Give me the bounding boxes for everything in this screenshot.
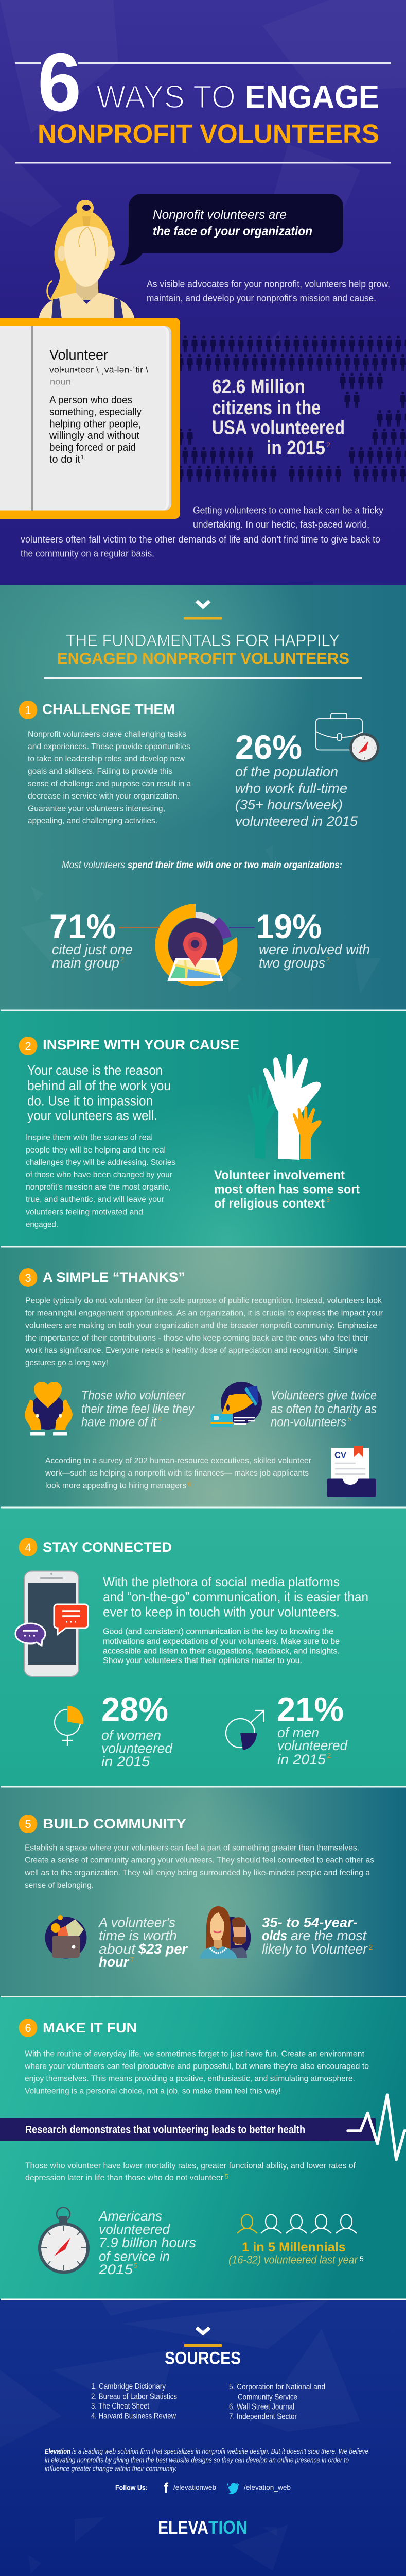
callout: most likely age group — [262, 1914, 373, 1957]
heading: section 4 stay connected: 4 — [25, 1541, 31, 1554]
text block: inspire intro: your volunteers as well. — [27, 1108, 157, 1123]
callout: feel like they have more time: 4 — [158, 1415, 162, 1423]
text block: thanks body — [25, 1296, 383, 1367]
text block: definition of volunteer: Volunteer — [49, 347, 108, 363]
text block: inspire intro: Your cause is the reason — [27, 1062, 163, 1078]
text block: about elevation: Elevation — [45, 2447, 70, 2456]
heading: section 4 stay connected — [19, 1538, 172, 1556]
callout: most likely age group: olds — [262, 1928, 287, 1943]
callout: value of volunteer time: time is worth — [99, 1928, 177, 1943]
panel: sources footer background — [0, 2299, 406, 2576]
heading: section 5 build community: 5 — [25, 1818, 31, 1831]
heading: section 6 make it fun — [19, 2019, 137, 2037]
callout: 21 percent of men: volunteered — [277, 1738, 348, 1753]
text block: follow us social links: Follow Us: — [115, 2483, 148, 2492]
callout: 19 percent statistic: 2 — [326, 955, 330, 963]
callout: 26 percent statistic: (35+ hours/week) — [235, 797, 343, 812]
callout: 71 percent statistic: main group — [52, 955, 119, 971]
text block: stay connected intro: and “on-the-go” communication, it is easier than — [103, 1589, 368, 1604]
text block: stay connected body: accessible and listen to their suggestions, feedback, and insights. — [103, 1647, 340, 1656]
callout: 62.6 million statistic: in 2015 — [267, 437, 325, 459]
text block: retention paragraph: volunteers often fall victim to the other demands of life and don't find time to give back to — [21, 534, 380, 545]
text block: challenge them body: sense of challenge and purpose can result in a — [28, 779, 191, 788]
callout: 71 percent statistic: 2 — [120, 955, 124, 963]
callout: 1 in 5 millennials — [228, 2240, 364, 2266]
text block: definition of volunteer: to do it — [49, 454, 80, 465]
text block: thanks body: for meaningful engagement opportunities. As an organization, it is crucial to express the impact your — [25, 1309, 383, 1318]
panel: challenge them background — [0, 585, 406, 1010]
text block: health benefits — [25, 2162, 356, 2182]
text block: retention paragraph: undertaking. In our hectic, fast-paced world, — [193, 519, 369, 530]
text block: inspire body: Inspire them with the stories of real — [26, 1133, 153, 1142]
panel: a simple thanks background — [0, 1247, 406, 1507]
callout: 7.9 billion hours: Americans — [98, 2208, 162, 2224]
text block: inspire body: people they will be helping and the real — [26, 1146, 166, 1155]
text block: build community body: Create a sense of community among your volunteers. They should feel connected to each other as — [25, 1856, 374, 1865]
text block: make it fun body: With the routine of everyday life, we sometimes forget to just have fun. Create an environment — [25, 2049, 365, 2059]
icon: female symbol with 28 percent wedge — [55, 1706, 83, 1746]
text block: make it fun body: enjoy themselves. This means providing a positive, enthusiastic, and stimulating atmosphere. — [25, 2074, 355, 2083]
text block: inspire body: engaged. — [26, 1220, 58, 1229]
callout: most likely age group: 35- to 54-year- — [262, 1914, 358, 1930]
panel: inspire with your cause background — [0, 1010, 406, 1247]
callout: 7.9 billion hours: 5 — [134, 2262, 137, 2269]
text block: follow us social links: f — [164, 2480, 169, 2496]
callout: 1 in 5 millennials: (16-32) volunteered last year — [228, 2253, 358, 2266]
text block: retention paragraph — [21, 505, 383, 558]
heading: section 4 stay connected: STAY CONNECTED — [43, 1539, 172, 1555]
text block: intro paragraph: maintain, and develop your nonprofit's mission and cause. — [147, 293, 376, 303]
callout: 19 percent statistic: 19% — [256, 907, 322, 945]
text block: source list: 3. The Cheat Sheet — [91, 2402, 150, 2411]
title: NONPROFIT VOLUNTEERS — [38, 119, 379, 148]
panel: stay connected background — [0, 1507, 406, 1787]
text block: follow us social links: /elevationweb — [173, 2483, 216, 2492]
callout: 19 percent statistic — [256, 907, 370, 971]
text block: definition of volunteer: vol•un•teer \ ˌvä-lən-ˈtir \ — [49, 365, 148, 375]
heading: section 6 make it fun: 6 — [25, 2022, 31, 2035]
text block: about elevation: influence greater change within their community. — [45, 2465, 177, 2473]
icon: chevron down — [184, 601, 222, 619]
icon: smartphone with chat bubbles — [15, 1571, 88, 1676]
icon: chevron down — [184, 2328, 222, 2347]
text block: build community body: well as to the organization. They will enjoy being surrounded by like-minded people and feeling a — [24, 1869, 370, 1877]
callout: religious context: 3 — [326, 1196, 330, 1204]
callout: speech bubble: Nonprofit volunteers are — [153, 208, 287, 222]
heading: fundamentals: THE FUNDAMENTALS FOR HAPPILY — [66, 631, 340, 650]
text block: stay connected intro — [103, 1574, 368, 1620]
callout: value of volunteer time: 7 — [130, 1956, 134, 1963]
callout: 7.9 billion hours — [98, 2208, 196, 2277]
text block: thanks body: volunteers are making on both your organization and the broader nonprofit community. Emphasize — [25, 1321, 377, 1330]
callout: 21 percent of men — [277, 1690, 348, 1767]
text block: stay connected body — [103, 1627, 340, 1665]
callout: 62.6 million statistic: 62.6 Million — [212, 376, 305, 398]
callout: religious context: of religious context — [214, 1196, 325, 1211]
text block: health benefits: 5 — [225, 2173, 228, 2180]
callout: 62.6 million statistic: citizens in the — [212, 397, 321, 419]
text block: intro paragraph: As visible advocates for your nonprofit, volunteers help grow, — [147, 279, 390, 290]
callout: most likely age group: are the most — [291, 1928, 367, 1943]
text block: survey of executives: look more appealing to hiring managers — [45, 1482, 186, 1490]
text block: stay connected body: Show your volunteers that their opinions matter to you. — [103, 1656, 302, 1665]
text block: inspire body: challenges they will be addressing. Stories — [26, 1158, 175, 1167]
heading: section 5 build community: BUILD COMMUNITY — [43, 1816, 186, 1832]
callout: 7.9 billion hours: of service in — [99, 2248, 170, 2264]
title: ENGAGE — [245, 79, 379, 115]
title: 6 — [38, 36, 81, 129]
callout: 1 in 5 millennials: 5 — [360, 2255, 364, 2263]
callout: 19 percent statistic: two groups — [259, 955, 325, 971]
callout: better health banner: Research demonstrates that volunteering leads to better health — [25, 2124, 305, 2136]
icon: briefcase and clock — [316, 713, 379, 762]
text block: source list: 2. Bureau of Labor Statistics — [91, 2393, 177, 2401]
text block: make it fun body: where your volunteers can feel productive and purposeful, but where they're also encouraged to — [24, 2062, 369, 2071]
text block: survey of executives — [45, 1456, 312, 1490]
text block: challenge them body: goals and skillsets. Failing to provide this — [28, 767, 172, 776]
callout: religious context: Volunteer involvement — [214, 1168, 345, 1182]
callout: give twice as often — [271, 1388, 377, 1429]
text block: organizations lead-in — [62, 860, 342, 871]
text block: retention paragraph: the community on a regular basis. — [21, 548, 154, 558]
text block: inspire body: nonprofit's mission are the most organic, — [26, 1183, 171, 1192]
callout: 28 percent of women: 28% — [101, 1690, 168, 1728]
callout: 28 percent of women: of women — [101, 1727, 161, 1743]
logo: elevation: TION — [208, 2517, 248, 2538]
heading: section 5 build community — [19, 1815, 186, 1833]
text block: source list: 4. Harvard Business Review — [91, 2412, 176, 2420]
text block: survey of executives: According to a survey of 202 human-resource executives, skilled volunteer — [45, 1456, 312, 1465]
callout: value of volunteer time: $23 per — [138, 1941, 188, 1957]
text block: build community body: Establish a space where your volunteers can feel a part of something greater than themselves. — [25, 1843, 359, 1853]
icon: stopwatch — [38, 2207, 90, 2274]
text block: health benefits: Those who volunteer have lower mortality rates, greater functional ability, and lower rates of — [25, 2162, 356, 2170]
text block: intro paragraph — [147, 279, 390, 303]
callout: 26 percent statistic: 26% — [235, 728, 302, 766]
callout: speech bubble — [119, 194, 343, 265]
text block: thanks body: work has significance. Everyone needs a healthy dose of appreciation and recognition. Simple — [25, 1346, 358, 1355]
text block: follow us social links — [115, 2480, 291, 2496]
callout: value of volunteer time: hour — [99, 1954, 129, 1970]
callout: give twice as often: as often to charity as — [271, 1402, 377, 1416]
callout: 1 in 5 millennials: 1 in 5 Millennials — [242, 2240, 346, 2255]
callout: give twice as often: non-volunteers — [271, 1415, 346, 1429]
heading: section 1 challenge them: 1 — [25, 704, 31, 717]
callout: 26 percent statistic: volunteered in 2015 — [235, 814, 358, 829]
heading: fundamentals: ENGAGED NONPROFIT VOLUNTEERS — [57, 650, 349, 667]
callout: 28 percent of women — [101, 1690, 173, 1769]
callout: feel like they have more time: Those who volunteer — [81, 1388, 186, 1402]
text block: definition of volunteer: willingly and without — [49, 430, 139, 442]
text block: thanks body: gestures go a long way! — [25, 1359, 108, 1367]
callout: value of volunteer time: about — [99, 1941, 136, 1957]
heading: section 3 a simple thanks: A SIMPLE “THANKS” — [43, 1269, 185, 1285]
text block: make it fun body: Volunteering is a personal choice, not a job, so make them feel this way! — [25, 2087, 281, 2096]
text block: survey of executives: 6 — [188, 1480, 191, 1488]
callout: most likely age group: 2 — [369, 1943, 373, 1951]
icon: man and woman portrait — [200, 1906, 251, 1959]
callout: 21 percent of men: 21% — [277, 1690, 344, 1728]
callout: 7.9 billion hours: 2015 — [98, 2262, 133, 2277]
callout: 62.6 million statistic — [212, 376, 345, 459]
text block: challenge them body: Guarantee your volunteers interesting, — [28, 805, 165, 813]
text block: source list: 6. Wall Street Journal — [229, 2403, 294, 2411]
heading: section 6 make it fun: MAKE IT FUN — [43, 2020, 137, 2036]
icon: raised hands — [248, 1054, 322, 1160]
callout: 21 percent of men: of men — [277, 1725, 319, 1740]
text block: retention paragraph: Getting volunteers to come back can be a tricky — [193, 505, 383, 515]
chart: donut with map pin — [119, 904, 255, 986]
icon: hand with credit card — [211, 1382, 262, 1427]
panel: make it fun background — [0, 1997, 406, 2299]
text block: source list: 1. Cambridge Dictionary — [91, 2382, 166, 2391]
callout: better health banner — [0, 2095, 406, 2160]
text block: source list: 7. Independent Sector — [229, 2412, 297, 2421]
callout: value of volunteer time — [98, 1914, 188, 1970]
callout: give twice as often: Volunteers give twice — [271, 1388, 377, 1402]
callout: value of volunteer time: A volunteer's — [98, 1914, 175, 1930]
callout: religious context — [214, 1168, 360, 1211]
text block: challenge them body: decrease in service with your organization. — [28, 792, 180, 801]
logo: elevation: ELEVA — [158, 2517, 208, 2538]
callout: give twice as often: 5 — [348, 1415, 351, 1423]
heading: section 2 inspire with your cause: INSPIRE WITH YOUR CAUSE — [43, 1037, 239, 1053]
text block: stay connected body: motivations and expectations of your volunteers. Make sure to be — [103, 1637, 340, 1646]
text block: definition of volunteer: A person who does — [49, 395, 132, 406]
panel: build community background — [0, 1787, 406, 1997]
callout: 62.6 million statistic: 2 — [326, 440, 330, 449]
text block: source list — [91, 2382, 325, 2421]
text block: definition of volunteer: something, especially — [49, 406, 142, 418]
panel: purple intro background — [0, 0, 406, 585]
icon: wallet with money — [45, 1915, 86, 1959]
text block: inspire body: of those who have been changed by your — [26, 1171, 173, 1179]
text block: definition of volunteer: helping other people, — [49, 418, 141, 430]
text block: inspire body: volunteers feeling motivated and — [26, 1208, 143, 1217]
callout: 19 percent statistic: were involved with — [259, 942, 370, 957]
callout: 71 percent statistic: 71% — [49, 907, 116, 945]
text block: organizations lead-in: Most volunteers — [62, 860, 125, 871]
icon: open dictionary book — [0, 318, 180, 519]
text block: stay connected body: Good (and consistent) communication is the key to knowing the — [103, 1627, 333, 1636]
text block: definition of volunteer: 1 — [81, 454, 84, 461]
callout: 7.9 billion hours: volunteered — [99, 2222, 170, 2237]
heading: fundamentals — [57, 631, 349, 667]
callout: 26 percent statistic: who work full-time — [235, 781, 347, 796]
chart: crowd of people pictogram — [180, 335, 406, 484]
callout: most likely age group: likely to Volunteer — [262, 1941, 368, 1957]
text block: about elevation — [45, 2447, 368, 2473]
icon: five people, one highlighted — [237, 2214, 357, 2233]
title — [15, 36, 391, 163]
text block: thanks body: People typically do not volunteer for the sole purpose of public recognition. Instead, volunteers look — [25, 1296, 382, 1306]
text block: inspire intro: behind all of the work you — [27, 1078, 171, 1093]
callout: 26 percent statistic: of the population — [235, 764, 338, 779]
text block: stay connected intro: ever to keep in touch with your volunteers. — [103, 1604, 340, 1620]
icon: male symbol with 21 percent wedge — [226, 1710, 263, 1750]
callout: 71 percent statistic: cited just one — [52, 942, 133, 957]
text block: inspire body: true, and authentic, and will leave your — [26, 1195, 165, 1204]
callout: 21 percent of men: in 2015 — [277, 1752, 326, 1767]
callout: religious context: most often has some sort — [214, 1182, 360, 1196]
text block: definition of volunteer: being forced or paid — [49, 442, 136, 453]
text block: stay connected intro: With the plethora of social media platforms — [103, 1574, 340, 1589]
icon: hands holding heart — [25, 1382, 73, 1435]
callout: 28 percent of women: in 2015 — [101, 1754, 150, 1769]
text block: health benefits: depression later in life than those who do not volunteer — [25, 2174, 224, 2182]
callout: feel like they have more time: have more of it — [81, 1415, 157, 1429]
text block: thanks body: the importance of their contributions - those who keep coming back are the ones who feel their — [25, 1334, 369, 1343]
callout: feel like they have more time — [81, 1388, 195, 1429]
text block: build community body: sense of belonging. — [25, 1881, 94, 1890]
heading: section 1 challenge them: CHALLENGE THEM — [42, 702, 175, 717]
callout: 7.9 billion hours: 7.9 billion hours — [99, 2235, 196, 2250]
text block: make it fun body — [24, 2049, 369, 2096]
text block: challenge them body — [28, 730, 191, 825]
heading: sources: SOURCES — [165, 2348, 241, 2368]
heading: section 2 inspire with your cause: 2 — [25, 1040, 31, 1053]
text block: build community body — [24, 1843, 374, 1890]
callout: speech bubble: the face of your organization — [153, 224, 312, 239]
callout: 62.6 million statistic: USA volunteered — [212, 417, 345, 439]
callout: 21 percent of men: 2 — [327, 1752, 331, 1759]
text block: inspire intro: do. Use it to impassion — [27, 1093, 153, 1109]
callout: 28 percent of women: volunteered — [101, 1740, 173, 1756]
logo: elevation — [158, 2517, 248, 2538]
icon: woman with blonde ponytail — [39, 200, 135, 319]
heading: section 1 challenge them — [19, 701, 175, 719]
text block: challenge them body: to take on leadership roles and develop new — [28, 755, 185, 764]
icon: CV in tray: CV — [334, 1450, 347, 1460]
text block: follow us social links: /elevation_web — [244, 2483, 291, 2492]
icon: CV in tray — [327, 1446, 376, 1497]
text block: challenge them body: appealing, and challenging activities. — [28, 817, 157, 825]
heading: section 3 a simple thanks: 3 — [25, 1272, 31, 1284]
text block: inspire body — [26, 1133, 175, 1229]
text block: challenge them body: and experiences. These provide opportunities — [28, 742, 190, 751]
text block: challenge them body: Nonprofit volunteers crave challenging tasks — [28, 730, 186, 739]
text block: definition of volunteer: noun — [50, 377, 71, 386]
text block: definition of volunteer — [49, 347, 148, 465]
title: WAYS TO — [96, 79, 236, 115]
text block: organizations lead-in: spend their time with one or two main organizations: — [128, 860, 342, 871]
text block: source list: Community Service — [238, 2393, 297, 2402]
callout: feel like they have more time: their time feel like they — [81, 1402, 195, 1416]
callout: 26 percent statistic — [235, 728, 358, 829]
text block: inspire intro — [27, 1062, 171, 1123]
text block: survey of executives: work—such as helping a nonprofit with its finances— makes job applicants — [45, 1469, 309, 1478]
callout: 71 percent statistic — [49, 907, 133, 971]
text block: source list: 5. Corporation for National and — [229, 2383, 325, 2392]
